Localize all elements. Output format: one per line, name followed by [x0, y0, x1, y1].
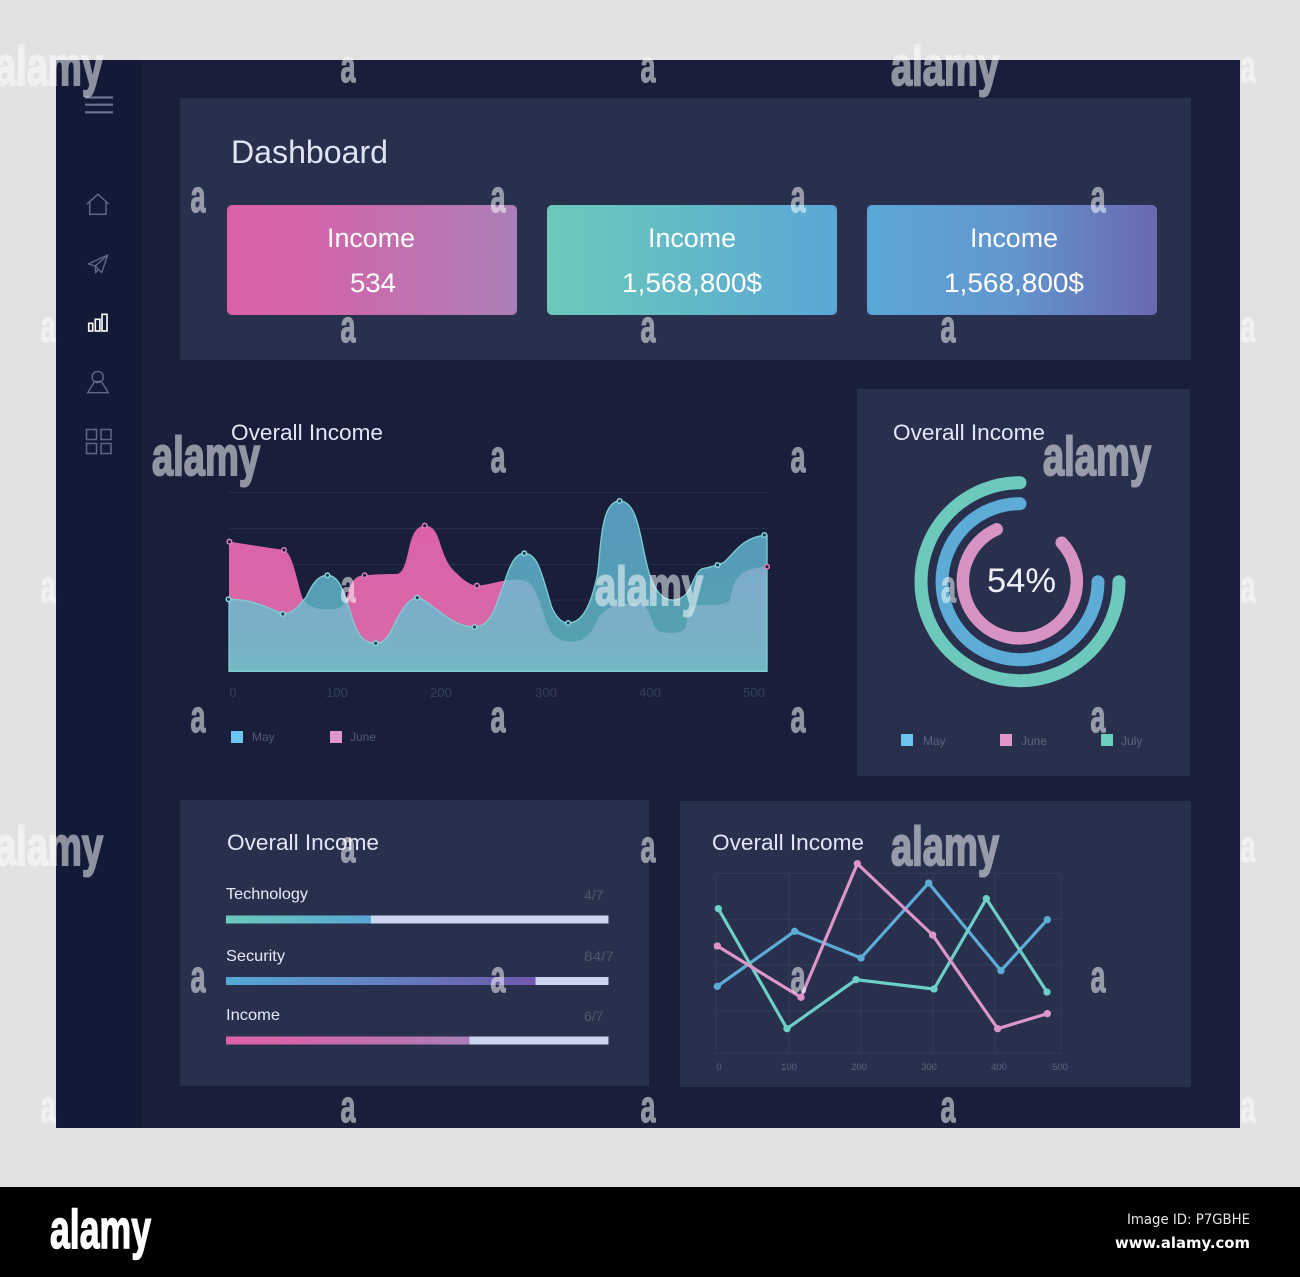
- icon: bars: [89, 314, 107, 331]
- card: income blue: [867, 205, 1157, 315]
- watermark: small letters: a: [640, 301, 656, 352]
- watermark: large logos: alamy: [891, 815, 999, 877]
- x axis labels: 500: [1052, 1062, 1068, 1073]
- heading: progress bars: Overall Income: [227, 830, 379, 855]
- card: income pink: [227, 205, 517, 315]
- watermark: small letters: a: [490, 951, 506, 1002]
- x axis labels: [229, 685, 765, 700]
- watermark: large logos: [0, 35, 1151, 877]
- watermark: large logos: alamy: [1043, 425, 1151, 487]
- watermark: small letters: a: [640, 821, 656, 872]
- x axis labels: 400: [991, 1062, 1007, 1073]
- center value: 54%: [987, 562, 1056, 600]
- x axis labels: 100: [326, 685, 348, 700]
- legend: June: [1021, 734, 1047, 748]
- x axis labels: 100: [781, 1062, 797, 1073]
- x axis labels: 0: [716, 1062, 722, 1073]
- watermark: small letters: a: [490, 171, 506, 222]
- bar: Income: Income: [226, 1007, 280, 1024]
- heading: line chart: Overall Income: [712, 830, 864, 855]
- watermark: small letters: a: [1240, 301, 1256, 352]
- watermark: small letters: a: [1240, 561, 1256, 612]
- card: income blue: Income: [970, 223, 1058, 253]
- legend: [231, 730, 376, 744]
- card: income pink: Income: [327, 223, 415, 253]
- bar: Technology: Technology: [226, 886, 308, 903]
- series: teal: [715, 895, 1051, 1032]
- panel: progress bars: [180, 800, 649, 1086]
- line chart: [714, 860, 1061, 1053]
- watermark: small letters: a: [1240, 1081, 1256, 1132]
- x axis labels: 300: [535, 685, 557, 700]
- radial rings: [921, 483, 1119, 681]
- icon: home: [87, 194, 109, 214]
- x axis labels: 0: [229, 685, 237, 700]
- panel: header: [180, 98, 1191, 360]
- data markers: May: [226, 499, 767, 646]
- heading: area chart: Overall Income: [231, 420, 383, 445]
- watermark: large logos: alamy: [595, 555, 703, 617]
- watermark: small letters: a: [340, 301, 356, 352]
- watermark: small letters: a: [1090, 951, 1106, 1002]
- watermark: small letters: [40, 41, 1256, 1132]
- card: income blue: 1,568,800$: [944, 268, 1084, 298]
- card: income teal: Income: [648, 223, 736, 253]
- bar: Technology: 4/7: [584, 887, 604, 903]
- heading: radial chart: Overall Income: [893, 420, 1045, 445]
- panel: area chart: [226, 420, 769, 744]
- icon: grid: [86, 430, 111, 454]
- panel: radial chart: [857, 389, 1190, 776]
- icon: menu: [85, 98, 113, 112]
- bar: Technology: [226, 886, 608, 924]
- bottom credit strip: [0, 1187, 1300, 1277]
- bar: Security: 84/7: [584, 948, 614, 964]
- watermark: small letters: a: [941, 561, 957, 612]
- watermark: small letters: a: [940, 1081, 956, 1132]
- watermark: small letters: a: [790, 171, 806, 222]
- card: income teal: [547, 205, 837, 315]
- watermark: small letters: a: [40, 561, 56, 612]
- x axis labels: 200: [430, 685, 452, 700]
- data markers: June: [227, 523, 769, 588]
- watermark: small letters: a: [190, 951, 206, 1002]
- heading: Dashboard: Dashboard: [231, 134, 388, 170]
- panel: line chart: [680, 801, 1191, 1087]
- series: blue: [714, 879, 1051, 990]
- bar: Income: [226, 1007, 608, 1044]
- watermark: small letters: a: [790, 691, 806, 742]
- watermark: small letters: a: [1090, 171, 1106, 222]
- bar: Income: 6/7: [584, 1008, 604, 1024]
- watermark: small letters: a: [490, 431, 506, 482]
- watermark: small letters: a: [790, 951, 806, 1002]
- watermark: small letters: a: [340, 1081, 356, 1132]
- watermark: small letters: a: [1090, 691, 1106, 742]
- card: income pink: 534: [350, 268, 396, 298]
- icon: user: [88, 371, 108, 393]
- credit logo: alamy: [50, 1198, 151, 1260]
- x axis labels: 400: [639, 685, 661, 700]
- legend: June: [350, 730, 376, 744]
- x axis labels: 200: [851, 1062, 867, 1073]
- credit text: www.alamy.com: [1115, 1234, 1250, 1252]
- watermark: small letters: a: [640, 41, 656, 92]
- icon: paper plane: [88, 255, 108, 273]
- watermark: small letters: a: [1240, 41, 1256, 92]
- x axis labels: 300: [921, 1062, 937, 1073]
- watermark: small letters: a: [190, 171, 206, 222]
- bar: Security: Security: [226, 948, 285, 965]
- legend: July: [1121, 734, 1142, 748]
- bar: Security: [226, 948, 614, 985]
- credit text: Image ID: P7GBHE: [1127, 1212, 1250, 1228]
- watermark: small letters: a: [190, 691, 206, 742]
- x axis labels: 500: [743, 685, 765, 700]
- area chart: [229, 501, 767, 671]
- card: income teal: 1,568,800$: [622, 268, 762, 298]
- watermark: small letters: a: [340, 41, 356, 92]
- sidebar: [56, 60, 142, 1128]
- watermark: small letters: a: [340, 821, 356, 872]
- watermark: small letters: a: [940, 301, 956, 352]
- watermark: small letters: a: [790, 431, 806, 482]
- watermark: small letters: a: [490, 691, 506, 742]
- watermark: small letters: a: [40, 301, 56, 352]
- watermark: small letters: a: [340, 561, 356, 612]
- series: pink: [714, 860, 1051, 1032]
- watermark: small letters: a: [40, 1081, 56, 1132]
- watermark: large logos: alamy: [152, 425, 260, 487]
- watermark: small letters: a: [640, 1081, 656, 1132]
- dashboard frame: [56, 60, 1240, 1128]
- legend: May: [252, 730, 275, 744]
- legend: [901, 734, 1142, 748]
- watermark: small letters: a: [1240, 821, 1256, 872]
- x axis labels: [716, 1062, 1068, 1073]
- watermark: large logos: alamy: [891, 35, 999, 97]
- legend: May: [923, 734, 946, 748]
- credit text: [1115, 1212, 1250, 1252]
